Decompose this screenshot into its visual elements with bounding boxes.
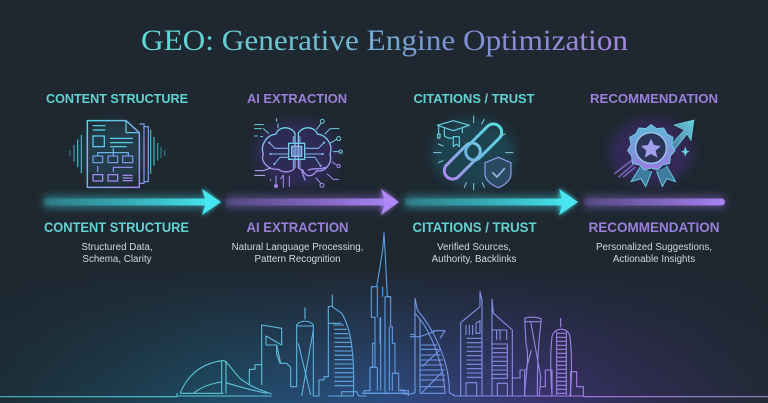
text: content structure detail: Structured Data, bbox=[81, 242, 153, 253]
icon detail: sound waves bbox=[70, 130, 165, 173]
heading: citations top: CITATIONS / TRUST bbox=[414, 91, 535, 106]
panel: citations and trust bbox=[405, 91, 578, 265]
title: GEO: Generative Engine Optimization bbox=[141, 24, 628, 57]
panel: ai extraction bbox=[226, 91, 399, 265]
icon detail: ribbons bbox=[631, 166, 676, 187]
heading: ai extraction top: AI EXTRACTION bbox=[247, 91, 347, 106]
heading: citations bottom: CITATIONS / TRUST bbox=[412, 220, 537, 235]
icon detail: sparks bbox=[434, 116, 513, 190]
text: recommendation detail bbox=[596, 242, 712, 265]
skyline: west section bbox=[177, 295, 408, 396]
text: content structure detail: Schema, Clarity bbox=[82, 254, 152, 265]
skyline: burj khalifa bbox=[364, 233, 408, 393]
text: citations detail bbox=[432, 242, 516, 265]
text: citations detail: Authority, Backlinks bbox=[432, 254, 516, 265]
icon detail: rosette bbox=[628, 125, 675, 170]
text: content structure detail bbox=[81, 242, 153, 265]
skyline: dubai outline bbox=[0, 233, 768, 397]
arrow: citations and trust bbox=[405, 188, 578, 216]
icon: chain link with shield bbox=[432, 116, 515, 190]
text: recommendation detail: Personalized Suggestions, bbox=[596, 242, 712, 253]
icon detail: chain bbox=[441, 121, 505, 182]
icon: ai brain chip bbox=[255, 119, 342, 188]
heading: recommendation bottom: RECOMMENDATION bbox=[588, 220, 720, 235]
heading: ai extraction bottom: AI EXTRACTION bbox=[246, 220, 348, 235]
icon detail: graduation cap bbox=[437, 121, 469, 147]
icon detail: shield with check bbox=[485, 157, 511, 188]
text: citations detail: Verified Sources, bbox=[437, 242, 511, 253]
arrow: recommendation bbox=[584, 196, 725, 208]
icon: award ribbon with arrow bbox=[610, 118, 694, 187]
icon detail: circuit traces bbox=[255, 119, 342, 188]
text: ai extraction detail: Pattern Recognition bbox=[254, 254, 341, 265]
arrow: content structure bbox=[44, 188, 221, 216]
heading: content structure bottom: CONTENT STRUCTURE bbox=[44, 220, 189, 235]
panel: content structure bbox=[44, 91, 221, 265]
arrow: ai extraction bbox=[226, 188, 399, 216]
icon detail: sparkle bbox=[681, 147, 690, 157]
icon: structured document bbox=[70, 121, 165, 187]
text: ai extraction detail: Natural Language Processing, bbox=[232, 242, 363, 253]
icon detail: rising arrow bbox=[667, 120, 694, 154]
skyline: ground line bbox=[0, 393, 768, 397]
panel: recommendation bbox=[584, 91, 725, 265]
text: ai extraction detail bbox=[232, 242, 363, 265]
icon detail: motion lines bbox=[615, 160, 635, 177]
heading: content structure top: CONTENT STRUCTURE bbox=[46, 91, 188, 106]
text: recommendation detail: Actionable Insights bbox=[613, 254, 695, 265]
skyline: burj al arab and towers bbox=[400, 292, 583, 396]
heading: recommendation top: RECOMMENDATION bbox=[590, 91, 718, 106]
